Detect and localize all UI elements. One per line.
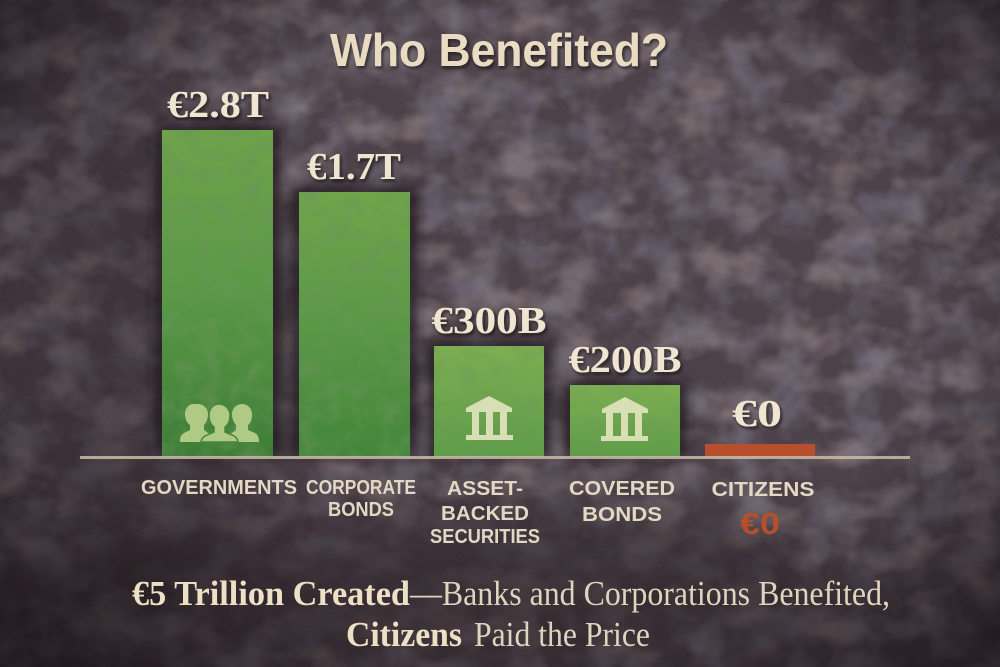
label: governments: GOVERNMENTS: [141, 477, 297, 499]
label: citizens: CITIZENS: [712, 479, 814, 501]
icon: bank: [466, 396, 513, 440]
footer headline: —Banks and Corporations Benefited,: [409, 574, 890, 613]
value: covered bonds: €200B: [568, 339, 682, 381]
label: asset-backed securities: [430, 478, 540, 548]
label: citizens: [712, 479, 814, 541]
label: corporate bonds: CORPORATE: [306, 477, 416, 499]
footer headline: Paid the Price: [474, 615, 650, 654]
label: covered bonds: [569, 478, 675, 526]
value: asset-backed securities: €300B: [432, 300, 546, 342]
footer headline: €5 Trillion Created: [132, 574, 411, 613]
value: corporate bonds: €1.7T: [307, 146, 401, 188]
label: corporate bonds: BONDS: [328, 499, 394, 521]
label: asset-backed securities: SECURITIES: [430, 526, 540, 548]
label: asset-backed securities: ASSET-: [447, 478, 523, 500]
bar: citizens: [705, 444, 815, 457]
label: citizens: €0: [740, 506, 780, 541]
title: Who Benefited?: [330, 24, 668, 76]
bar: covered bonds: [570, 385, 680, 457]
label: asset-backed securities: BACKED: [441, 503, 529, 525]
baseline: [80, 456, 910, 459]
label: covered bonds: COVERED: [569, 478, 675, 500]
icon: bank: [601, 397, 648, 441]
label: covered bonds: BONDS: [582, 504, 662, 526]
bar: asset-backed securities: [434, 346, 544, 457]
value: governments: €2.8T: [167, 84, 269, 126]
label: corporate bonds: [306, 477, 416, 521]
value: citizens: €0: [732, 393, 782, 435]
footer headline: Citizens: [346, 615, 462, 654]
bar chart: [80, 125, 910, 459]
bar: governments: [162, 130, 273, 457]
footer headline: [132, 574, 890, 654]
bar: corporate bonds: [299, 192, 410, 457]
icon: people: [180, 404, 259, 442]
bar shadows: [155, 125, 687, 457]
